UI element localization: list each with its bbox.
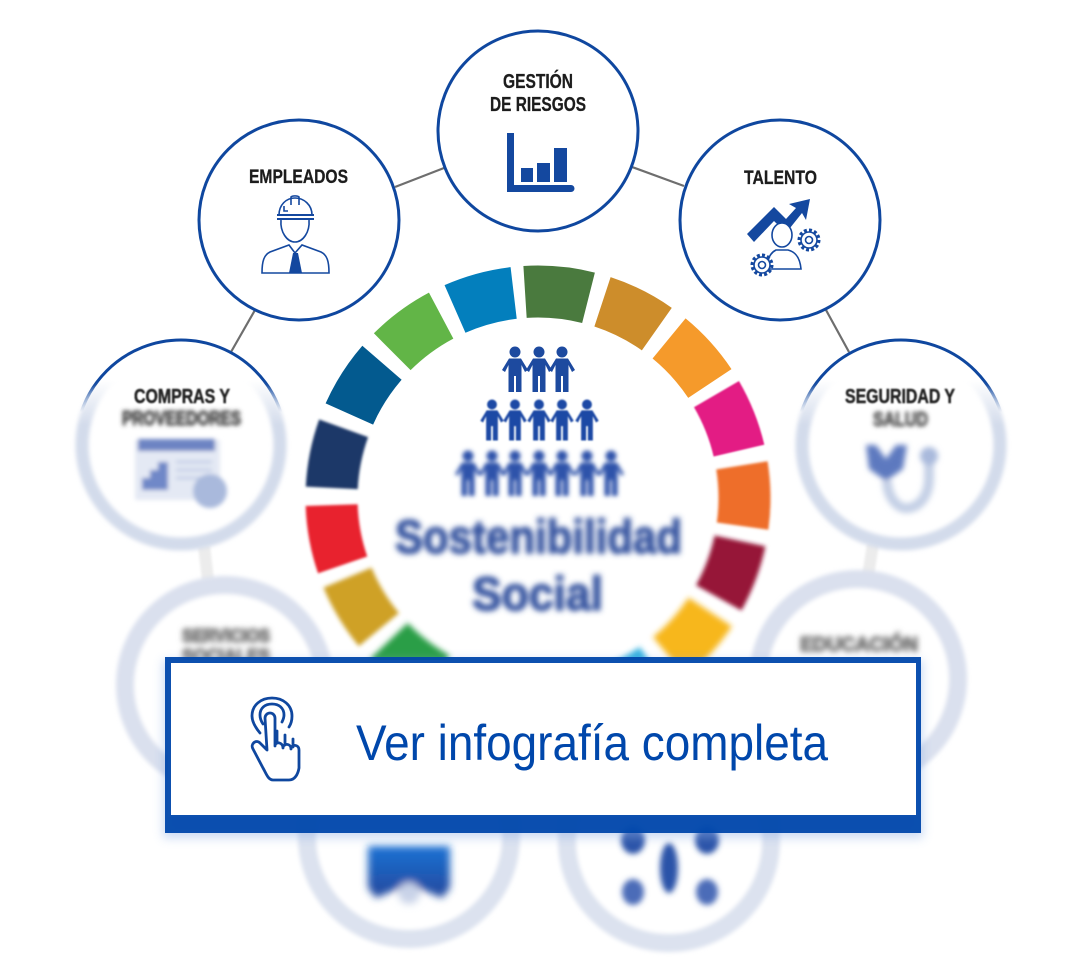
connector lines — [204, 167, 873, 580]
circle: talento: TALENTO — [744, 167, 817, 189]
circle: compras y proveedores: PROVEEDORES — [122, 408, 241, 430]
label: lower left circle: SERVICIOS — [182, 626, 270, 646]
circle: lower left — [125, 585, 325, 785]
center title — [395, 510, 682, 620]
label: lower right circle: EDUCACIÓN — [800, 632, 918, 656]
SDG colour ring — [246, 206, 830, 790]
circle: gestión de riesgos: DE RIESGOS — [490, 94, 586, 116]
button: ver infografía completa: Ver infografía completa — [356, 715, 828, 771]
icon: person with gears — [752, 223, 819, 275]
icon: bottom left — [368, 846, 450, 904]
center title: Sostenibilidad — [395, 510, 682, 563]
circle: empleados — [199, 120, 399, 320]
circle: empleados: EMPLEADOS — [249, 166, 348, 188]
circle: bottom right — [567, 739, 771, 943]
circle: lower right — [758, 579, 958, 779]
icon: hand tap — [252, 698, 299, 780]
circle: seguridad y salud — [796, 340, 1006, 550]
circle: seguridad y salud: SEGURIDAD Y — [845, 386, 956, 408]
icon: bar chart — [507, 133, 575, 192]
circle: gestión de riesgos: GESTIÓN — [503, 69, 573, 93]
circle: gestión de riesgos — [438, 31, 638, 231]
icon: worker — [262, 196, 329, 273]
circle: compras y proveedores — [76, 340, 286, 550]
center title: Social — [472, 567, 603, 620]
center people icon — [455, 346, 624, 496]
label: lower left circle — [182, 626, 270, 666]
icon: report — [135, 439, 227, 508]
circle: compras y proveedores: COMPRAS Y — [134, 386, 231, 408]
button: ver infografía completa — [163, 657, 923, 838]
label: lower left circle: SOCIALES — [182, 646, 270, 666]
icon: stethoscope — [866, 445, 938, 508]
circle: talento — [680, 120, 880, 320]
icon: growth arrow — [747, 199, 810, 242]
circle: bottom left — [307, 735, 511, 939]
circle: seguridad y salud: SALUD — [873, 409, 928, 431]
icon: bottom right — [621, 826, 719, 905]
